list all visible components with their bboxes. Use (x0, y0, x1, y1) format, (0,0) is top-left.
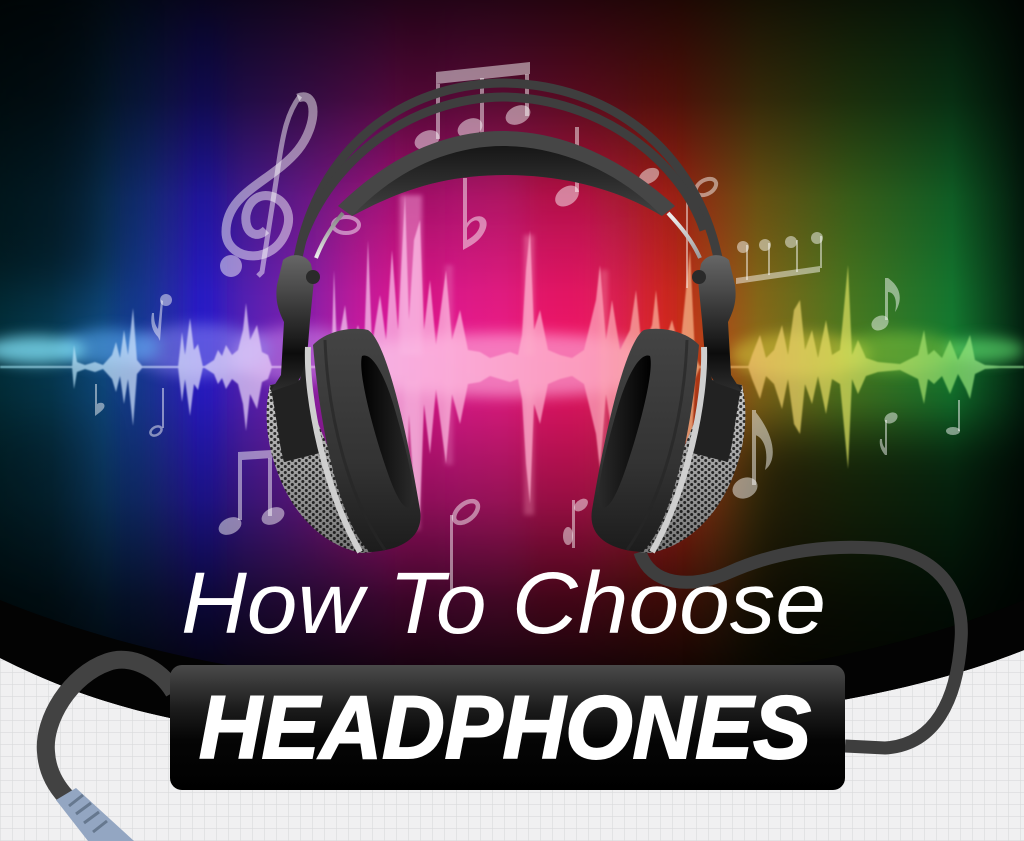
heads behind headband (551, 181, 583, 211)
silver arms (316, 213, 700, 258)
small notes (95, 127, 960, 590)
left small (160, 294, 172, 306)
right small (882, 410, 900, 426)
cable: left with jack (46, 660, 174, 841)
headband wires (298, 83, 718, 258)
headband pad (338, 131, 675, 216)
central glow (335, 333, 685, 397)
waveform (0, 195, 1024, 539)
side darkening (740, 430, 1024, 690)
left ear cup (267, 255, 421, 553)
streaks (400, 195, 422, 355)
black curved band (0, 600, 1024, 732)
icon: beamed notes bottom left (216, 450, 287, 538)
flat centre (463, 178, 487, 250)
title: How To Choose: How To Choose (181, 555, 826, 652)
icon: treble clef (220, 96, 313, 277)
icon: beamed notes top (411, 62, 534, 154)
headphones (267, 83, 745, 553)
right ear cup (591, 255, 745, 553)
icon: note row right (736, 232, 823, 284)
title: HEADPHONES: HEADPHONES (199, 677, 811, 777)
title bar (170, 665, 845, 790)
bottom grid paper (0, 650, 1024, 841)
lower hollow (450, 497, 482, 527)
music notes (95, 62, 960, 590)
cable: right (640, 547, 961, 748)
